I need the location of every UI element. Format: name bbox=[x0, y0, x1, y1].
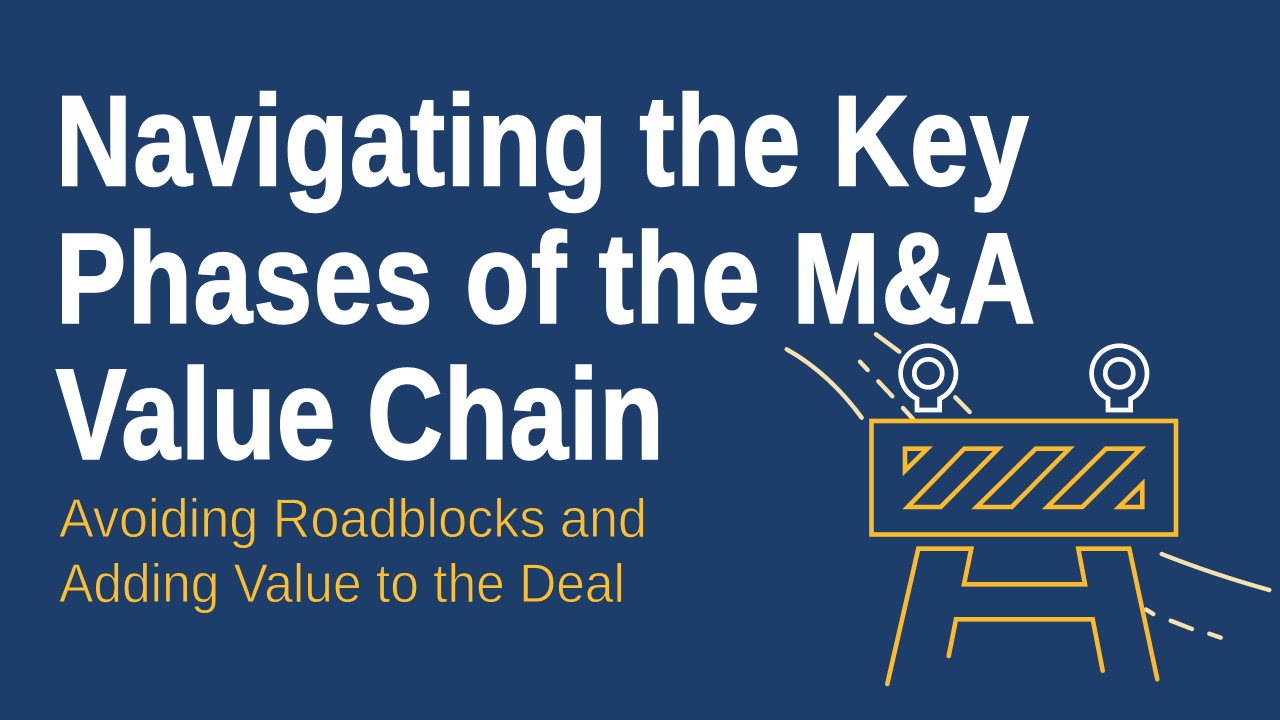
subtitle bbox=[59, 487, 647, 614]
icon: barricade legs bbox=[887, 549, 1157, 684]
subtitle: Avoiding Roadblocks and bbox=[59, 487, 647, 549]
icon: motion lines right bbox=[1146, 554, 1269, 638]
icon: barricade board bbox=[872, 421, 1176, 534]
icon: motion lines left bbox=[787, 334, 970, 419]
subtitle: Adding Value to the Deal bbox=[59, 552, 625, 614]
title: Value Chain bbox=[56, 343, 664, 486]
icon: right warning lamp bbox=[1092, 346, 1147, 410]
icon: left warning lamp bbox=[901, 346, 956, 410]
title: Phases of the M&A bbox=[56, 207, 1035, 350]
title: Navigating the Key bbox=[56, 69, 1029, 212]
title bbox=[56, 69, 1035, 486]
